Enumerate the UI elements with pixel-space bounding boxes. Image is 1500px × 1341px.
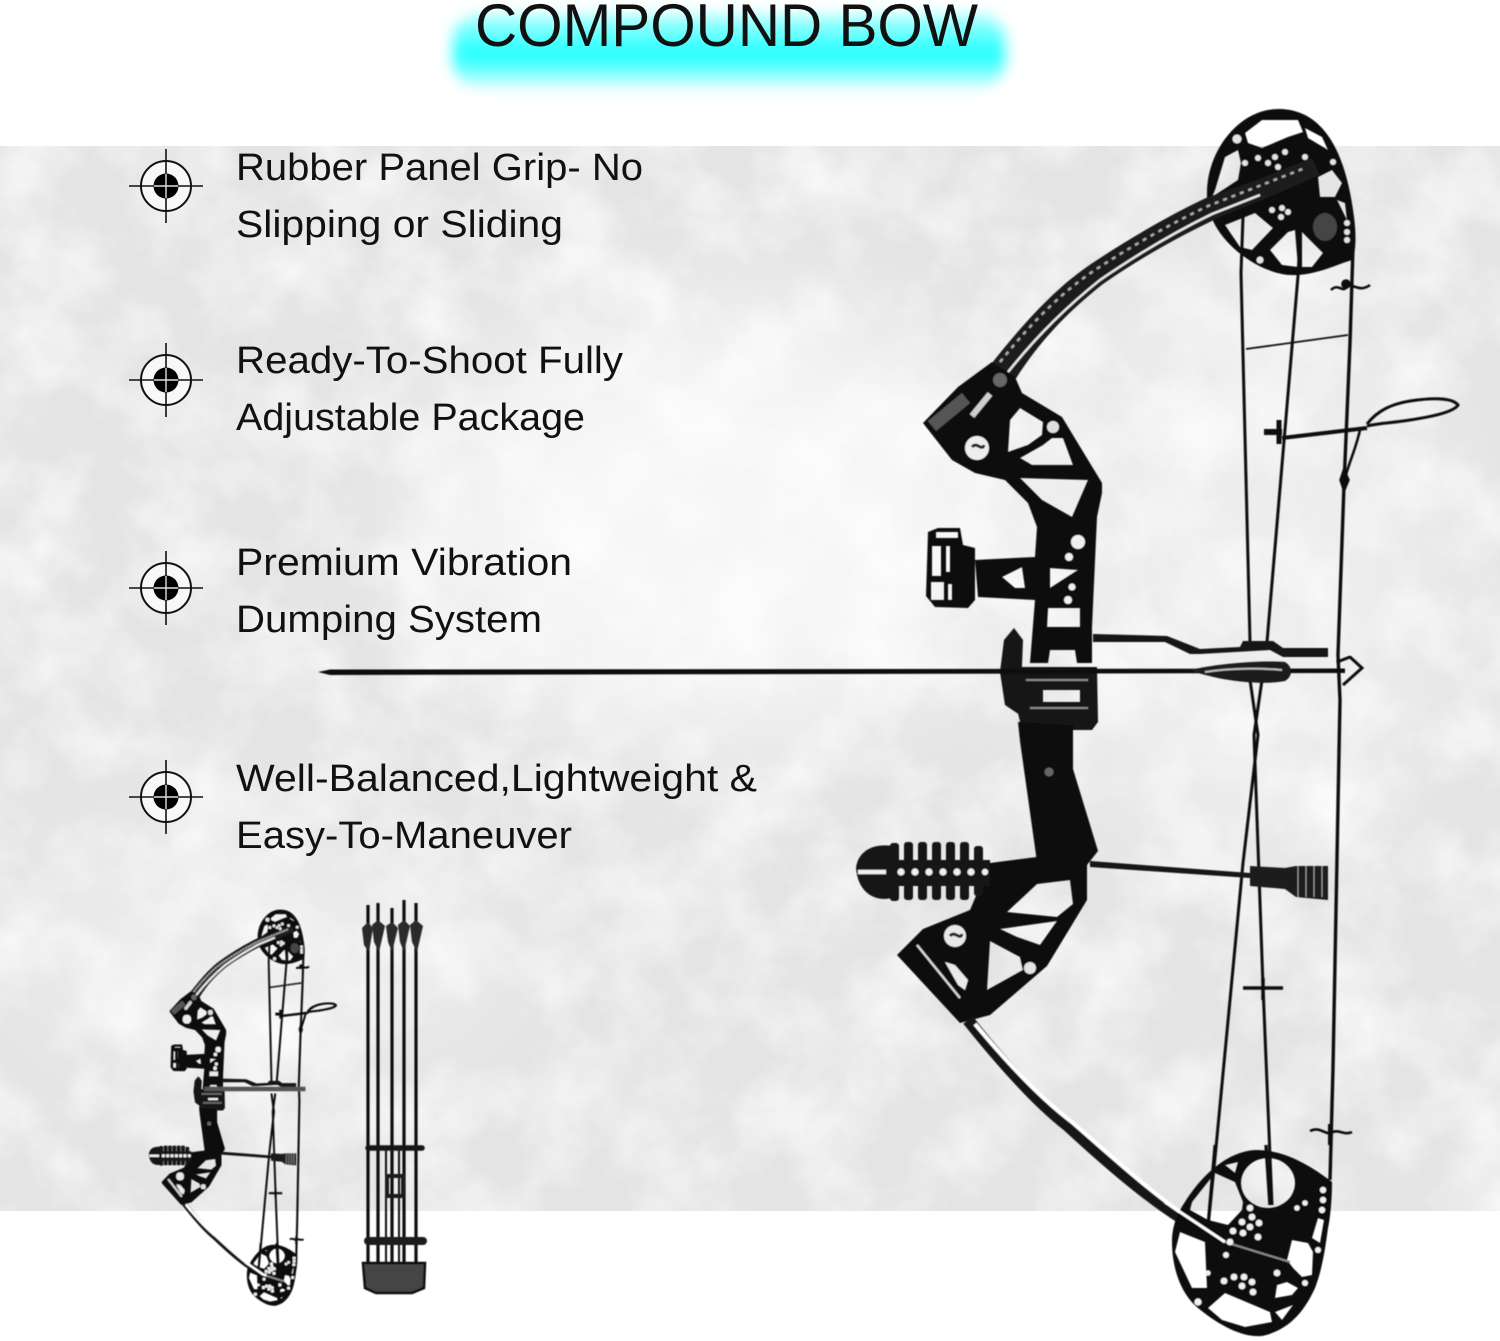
panel: cloudy grey background [0,146,1500,1211]
feature 1: rubber panel grip [129,147,654,246]
bow sight [926,528,975,608]
string loop [1282,399,1458,492]
text block: Premium Vibration [236,542,572,584]
icon: target crosshair [129,551,203,625]
small bow thumbnail [149,910,336,1305]
grip [1018,722,1098,865]
thumbnail arrow [205,1087,305,1091]
arrow shafts [368,900,416,1262]
upper cam wheel [1207,109,1355,275]
nocking point loop [1337,657,1362,685]
icon: target crosshair [129,149,203,223]
front stabilizer dampener [856,842,990,901]
large compound bow illustration [856,109,1458,1336]
grip screw [1044,768,1054,776]
quiver cup [363,1263,425,1293]
text block: Easy-To-Maneuver [236,815,572,857]
lower riser and limb pocket [897,857,1087,1023]
arrow [318,657,1362,685]
lower limb [968,1020,1240,1252]
cyan glow highlight [453,14,1005,87]
feature 3: vibration dampening [129,542,583,641]
text block: Dumping System [236,599,542,641]
rear stabilizer rod and weight [1090,861,1328,900]
string silencers and peep fittings [1243,280,1370,1145]
title banner [453,0,1005,87]
lower strap [368,1237,423,1245]
text block: Ready-To-Shoot Fully [236,340,623,382]
text block: Well-Balanced,Lightweight & [236,758,757,800]
text block: Rubber Panel Grip- No [236,147,643,189]
text block: Adjustable Package [236,397,585,439]
arrow bundle with quiver [362,900,425,1293]
quiver straps [368,1145,422,1151]
fletchings [362,920,423,952]
arrow rest and riser block [1000,628,1098,730]
icon: target crosshair [129,760,203,834]
text block: Slipping or Sliding [236,204,563,246]
upper stabilizer rod [1093,634,1328,657]
lower cam wheel [1165,1145,1332,1336]
upper riser and limb pocket [923,362,1102,663]
quiver clip [387,1176,403,1196]
fletching highlight [1205,669,1282,672]
arrow shaft [318,668,1345,675]
feature 4: well balanced [129,758,768,857]
feature 2: ready to shoot [129,340,634,439]
upper limb [992,158,1320,380]
bow strings and cables [1208,183,1353,1227]
arrow fletching [1190,661,1291,683]
icon: target crosshair [129,343,203,417]
